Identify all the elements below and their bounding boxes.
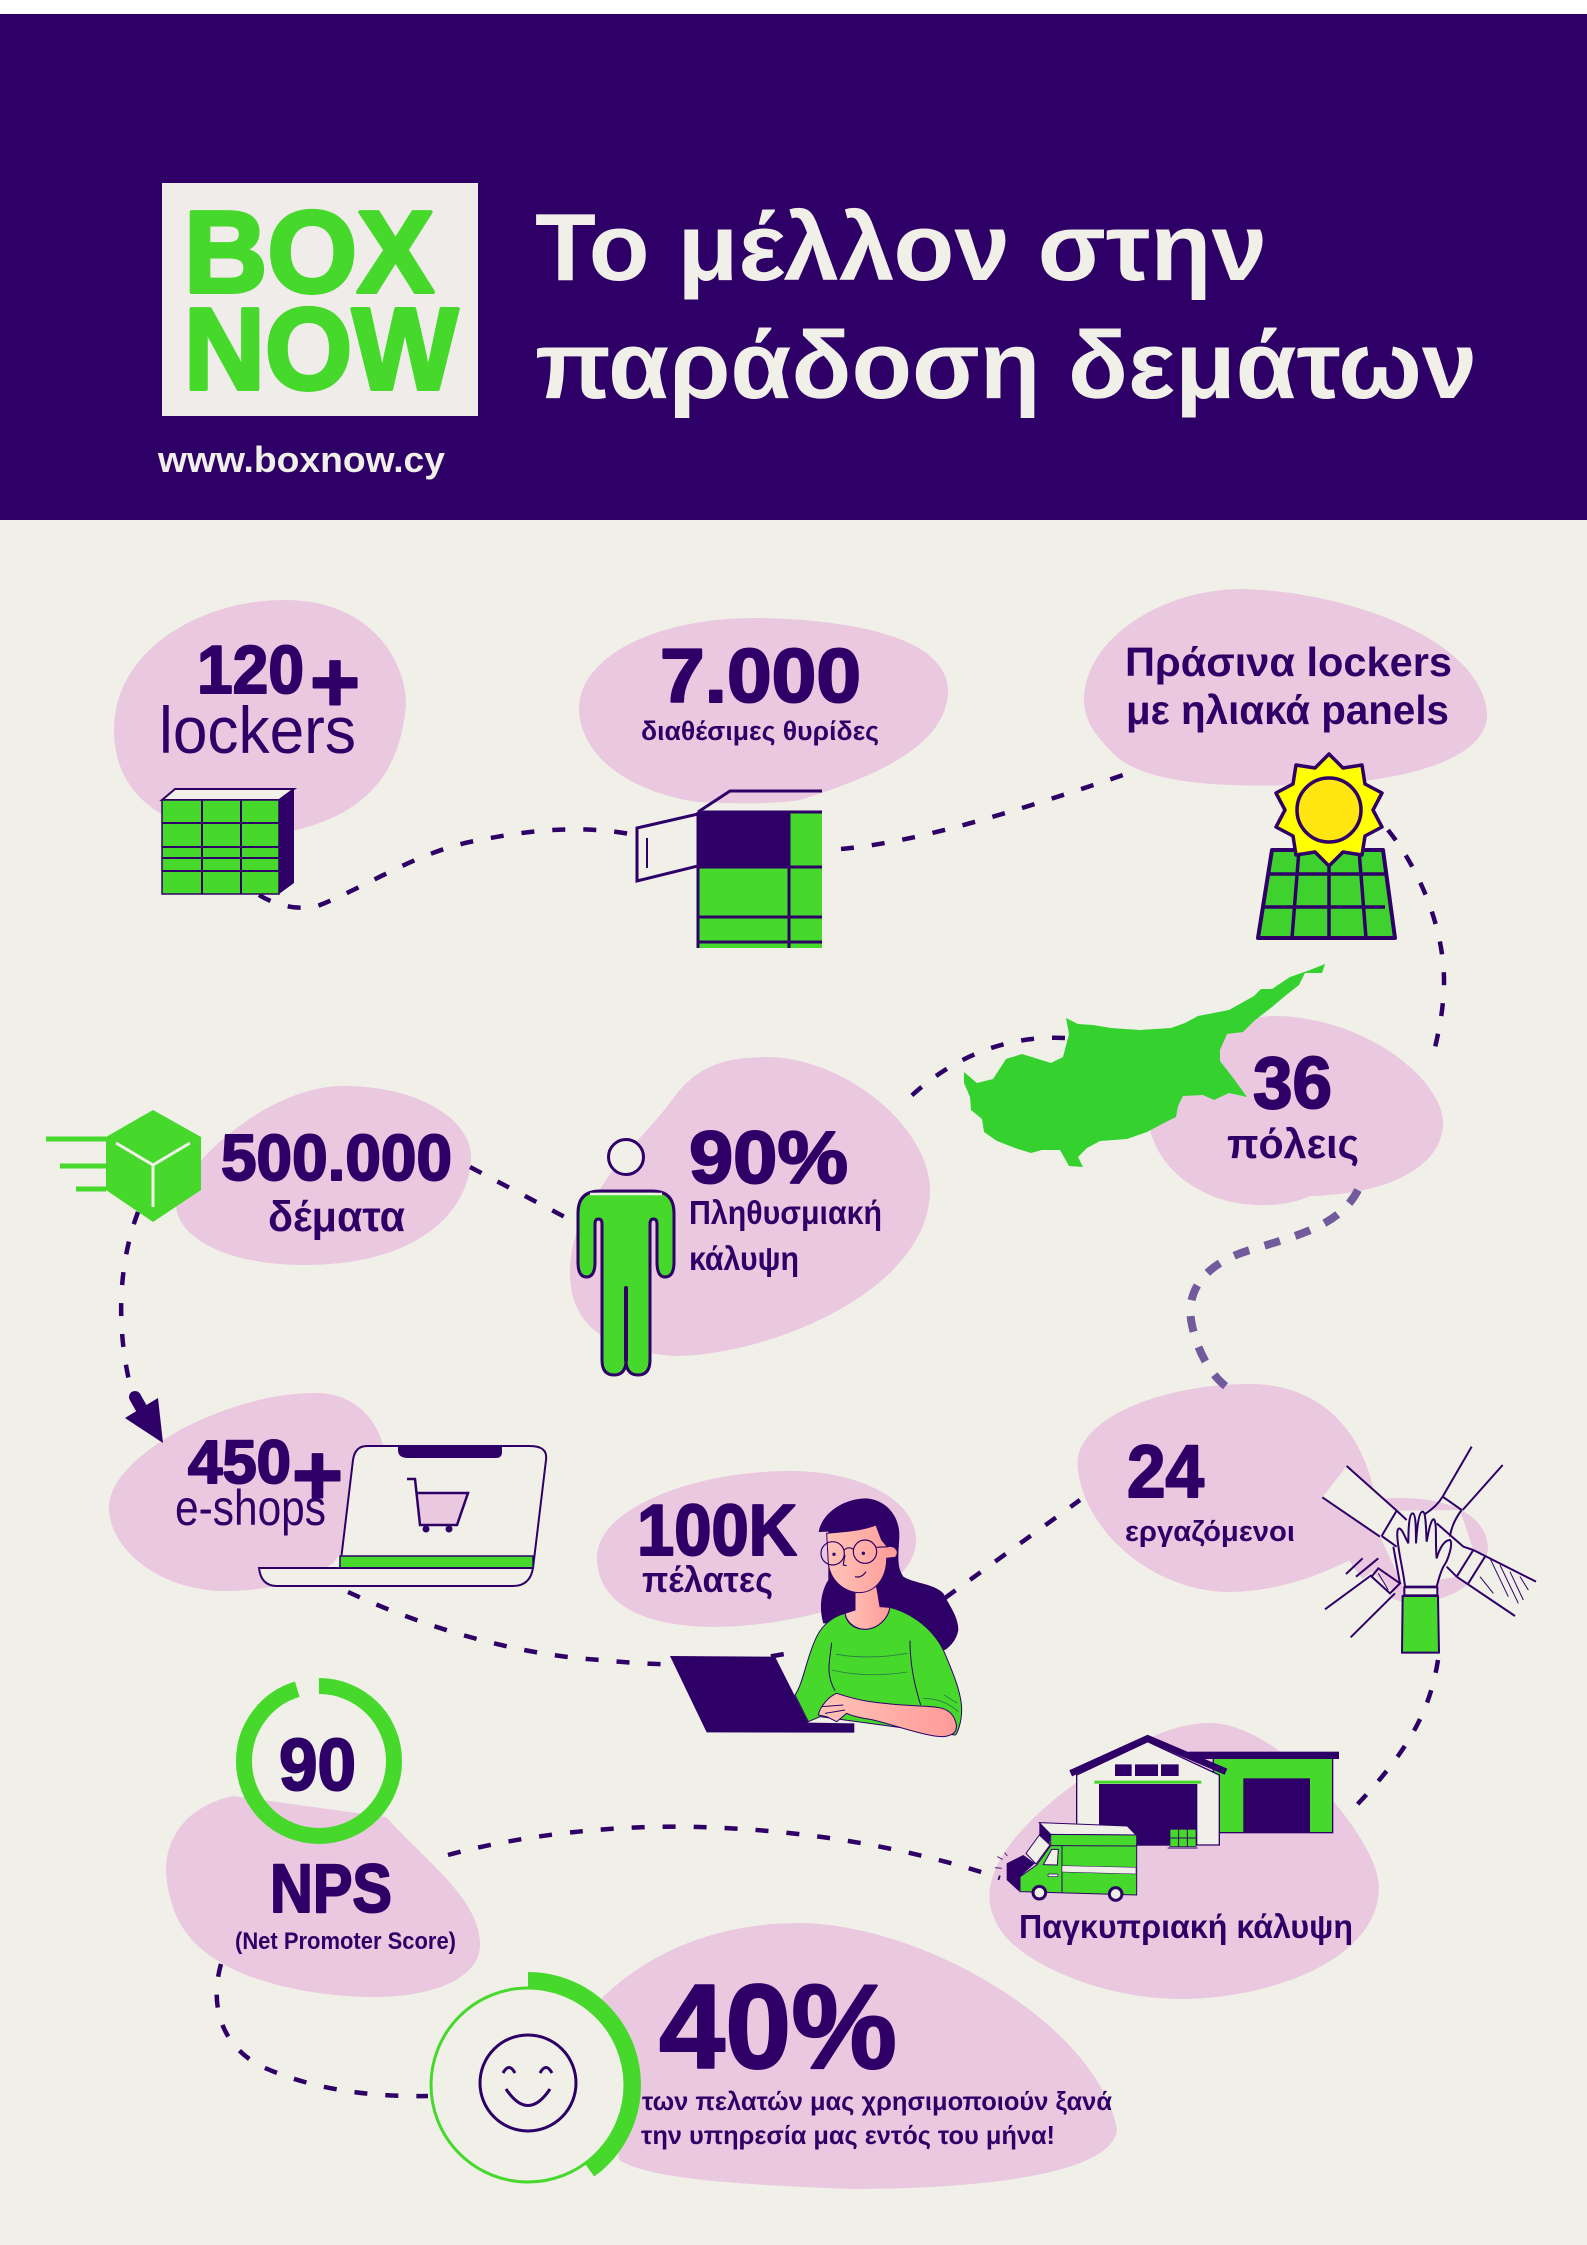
text: 120+ lockers: lockers [159,693,356,767]
blob: e-shops [109,1393,383,1591]
blob: employees small [1348,1498,1488,1603]
text: 100K customers: 100K [637,1491,797,1571]
arrow: island to population [900,1038,1065,1107]
logo: BOX NOW: NOW [184,284,458,414]
text: 40 percent returning customers: των πελατών μας χρησιμοποιούν ξανά [642,2086,1112,2116]
blob: customers [597,1471,916,1627]
NPS score ring: 90 [279,1725,356,1806]
text: green lockers [1125,639,1452,733]
title: παράδοση δεμάτων [535,312,1477,419]
text: 7.000 doors [641,634,879,746]
smile ring [423,1980,633,2190]
icon: person [578,1140,674,1375]
text: 120+ lockers: 120 [197,632,304,708]
text: 40 percent returning customers: την υπηρεσία μας εντός του μήνα! [641,2120,1055,2150]
title [535,194,1477,419]
arrow: solar to cities [1388,830,1444,1060]
icon: woman at laptop [670,1498,962,1737]
arrow: NPS to smile [217,1964,428,2096]
website url: www.boxnow.cy [157,439,445,480]
blob: lockers [114,600,406,836]
icon: big locker with open door [637,791,822,948]
text: 7.000 doors: διαθέσιμες θυρίδες [641,716,879,746]
blob: cities [1150,1016,1443,1205]
text: 7.000 doors: 7.000 [660,634,861,719]
blob: parcels [176,1086,471,1265]
text: 100K customers: πέλατες [642,1559,773,1600]
blob: employees [1078,1384,1373,1592]
text: NPS: NPS [270,1850,392,1927]
text: 40 percent returning customers [641,1960,1112,2150]
logo: BOX NOW: BOX [184,187,434,317]
text: 450+ e-shops: + [292,1428,343,1523]
text: 36 cities: πόλεις [1227,1120,1359,1167]
icon: warehouse and van [995,1738,1339,1900]
arrow: lockers to doors [259,829,630,908]
text: 24 employees [1125,1430,1295,1548]
blob: NPS [166,1796,480,1997]
header band [0,14,1587,520]
arrow: e-shops to customers [348,1592,800,1664]
text: 24 employees: εργαζόμενοι [1125,1516,1295,1548]
text: 40 percent returning customers: 40% [659,1960,897,2094]
text: 500.000 parcels: 500.000 [221,1121,452,1194]
title: Το μέλλον στην [535,194,1267,301]
text: 450+ e-shops [175,1428,343,1536]
blob: green lockers [1084,589,1487,786]
text: green lockers: Πράσινα lockers [1125,639,1452,685]
text: NPS [235,1850,456,1955]
text: 500.000 parcels: δέματα [268,1193,405,1241]
blob: coverage [989,1723,1379,1999]
text: 36 cities [1227,1043,1359,1167]
text: 90% population coverage: Πληθυσμιακή [689,1194,882,1231]
icon: team hands [1322,1447,1536,1653]
icon: small locker [162,789,294,894]
text: 120+ lockers [159,632,360,767]
text: green lockers: με ηλιακά panels [1126,687,1449,733]
NPS score ring [244,1686,394,1836]
text: NPS: (Net Promoter Score) [235,1928,456,1955]
blob: doors [579,618,948,803]
text: 36 cities: 36 [1253,1043,1332,1124]
arrow: doors to green lockers [841,771,1135,849]
arrow: employees to warehouse [1352,1660,1438,1810]
icon: laptop with cart [259,1446,546,1586]
text: 450+ e-shops: e-shops [175,1480,326,1536]
arrow: customers to employees [945,1500,1080,1598]
text: 450+ e-shops: 450 [188,1428,291,1496]
text: 120+ lockers: + [310,635,360,730]
text: 90% population coverage [689,1116,882,1277]
text: 90% population coverage: 90% [689,1116,848,1199]
text: island-wide coverage: Παγκυπριακή κάλυψη [1019,1908,1353,1945]
text: 500.000 parcels [221,1121,452,1241]
arrow: NPS to van [448,1827,1000,1878]
blob: population coverage [570,1057,930,1356]
text: 24 employees: 24 [1127,1430,1204,1513]
icon: map of Cyprus [964,964,1325,1167]
logo: BOX NOW [162,183,478,416]
arrow: cities to employees [1190,1190,1358,1388]
blob: 40 percent [600,1923,1117,2189]
icon: solar panel with sun [1258,754,1395,938]
text: 90% population coverage: κάλυψη [689,1240,799,1277]
arrow: parcels to e-shops [121,1212,163,1443]
icon: parcel box [46,1110,201,1222]
text: 100K customers [637,1491,797,1600]
arrow: parcels to population [470,1167,580,1225]
